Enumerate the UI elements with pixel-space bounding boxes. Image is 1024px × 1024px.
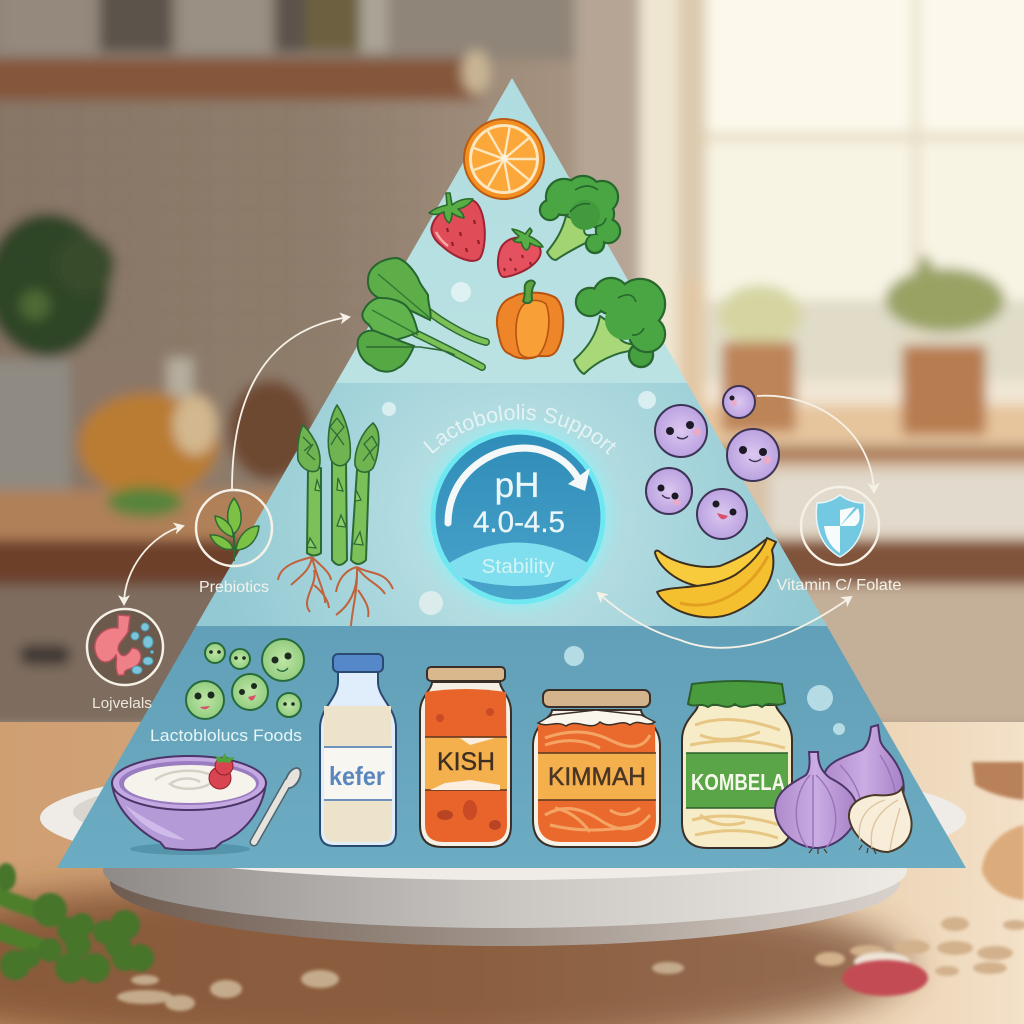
curved heading: Lactobololis Support (423, 404, 616, 455)
table props: greens, seeds and vegetables (0, 762, 1024, 1011)
lens: stability (449, 542, 588, 586)
icon: spinach (358, 258, 486, 372)
tier: middle prebiotics and pH (196, 383, 827, 626)
arrow: prebiotics to top tier (232, 317, 349, 489)
icon: onions (775, 725, 912, 854)
text: stability: Stability (482, 556, 554, 578)
icon: kefer bottle (320, 654, 396, 846)
wooden table (0, 722, 1024, 1024)
icon: broccoli upper (540, 176, 620, 260)
icon: leaf sprout (210, 498, 259, 561)
tier: top fruit and vegetables (336, 78, 687, 383)
bacteria: purple (646, 386, 779, 539)
text: kimmah: KIMMAH (548, 763, 646, 791)
text: kish: KISH (437, 748, 495, 776)
icon: strawberry large (429, 193, 485, 261)
text: pH: pH (495, 466, 539, 505)
text: vitamin: Vitamin C/ Folate (776, 577, 902, 594)
arrow: gut to prebiotics (124, 526, 183, 604)
text: pH range: 4.0-4.5 (473, 506, 565, 539)
arrow: vitamin to pH (598, 593, 851, 648)
arrow: bacteria to vitamin (757, 396, 874, 492)
text: prebiotics: Prebiotics (199, 579, 269, 596)
callout: vitamin (776, 487, 902, 594)
text: foods heading: Lactoblolucs Foods (150, 726, 302, 745)
icon: microbes (131, 623, 154, 674)
arrowhead (568, 468, 590, 491)
arrow: curved white arrow (448, 448, 578, 523)
callout: gut levels (87, 609, 163, 712)
icon: orange bell pepper (497, 281, 563, 358)
text: kombela: KOMBELA (691, 769, 785, 795)
text: gut levels: Lojvelals (92, 695, 152, 712)
bacteria: green (186, 639, 304, 719)
icon: gut (95, 615, 141, 675)
icon: kish jar (420, 667, 511, 847)
text: kefer: kefer (329, 761, 385, 791)
icon: kombela jar (682, 681, 792, 848)
icon: spoon (254, 765, 304, 842)
icon: shield (816, 495, 864, 557)
pH stability gauge (426, 425, 610, 609)
icon: strawberry small (498, 228, 543, 277)
callout: prebiotics (196, 490, 272, 596)
plate (40, 756, 966, 946)
tier: bottom fermented foods (57, 626, 966, 868)
icon: asparagus with roots (278, 405, 393, 626)
icon: bananas (655, 538, 776, 617)
icon: broccoli lower (574, 278, 665, 374)
icon: yogurt bowl (112, 753, 266, 855)
pyramid (57, 78, 966, 868)
icon: kimmah jar (533, 690, 660, 847)
icon: orange (464, 119, 544, 199)
